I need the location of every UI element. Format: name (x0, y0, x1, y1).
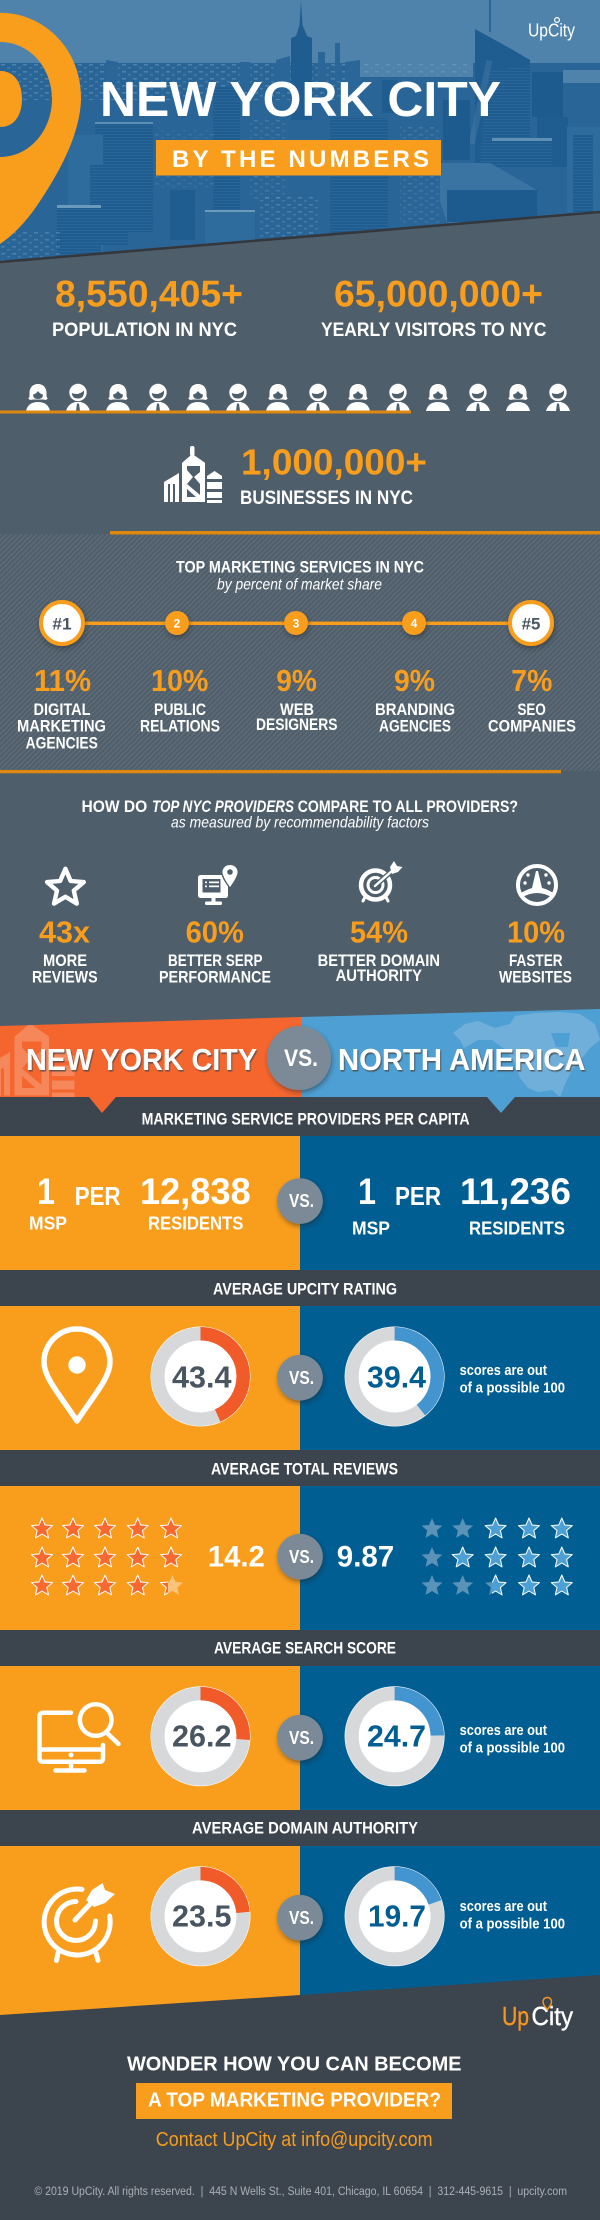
banner: New York City: NEW YORK CITY (26, 1042, 257, 1077)
panel: NYC per capita (0, 1136, 300, 1270)
vs badge: VS. (289, 1547, 314, 1567)
factor: better SERP performance (159, 864, 271, 987)
stat: businesses: 1,000,000+ (241, 442, 427, 482)
gray stats background (0, 200, 600, 1030)
stat: yearly visitors (321, 274, 547, 341)
note: scores out of 100: scores are out (460, 1722, 547, 1739)
vs badge: VS. (289, 1368, 314, 1388)
factor: faster websites: 10% (507, 914, 565, 949)
logo: UpCity footer: Up (502, 2001, 529, 2031)
panel: North America per capita: PER (395, 1181, 441, 1211)
stat: population: 8,550,405+ (55, 274, 243, 314)
service: SEO companies (488, 663, 576, 736)
panel: NYC per capita: PER (75, 1181, 121, 1211)
donut: North America 19.7: 19.7 (368, 1899, 426, 1934)
value: 9.87: 9.87 (337, 1541, 394, 1574)
section: average domain authority (0, 1818, 600, 2015)
service: SEO companies: COMPANIES (488, 717, 576, 736)
stat: yearly visitors: 65,000,000+ (334, 274, 543, 314)
donut: North America 39.4 (345, 1326, 445, 1426)
section: average total reviews (0, 1459, 600, 1630)
footer text: © 2019 UpCity. All rights reserved. | 445 N Wells St., Suite 401, Chicago, IL 60654 | 312-445-9615 | upcity.com (34, 2186, 567, 2198)
panel: top marketing services (0, 531, 600, 773)
stat: population (52, 274, 243, 341)
icon: large orange location pin (0, 13, 81, 244)
service: SEO companies: SEO (518, 700, 546, 719)
service: branding agencies: BRANDING (375, 700, 455, 719)
icon: monitor with pin (198, 864, 239, 905)
service: public relations: RELATIONS (140, 717, 220, 736)
factor: more reviews: MORE (43, 951, 87, 970)
stars: NYC (32, 1518, 183, 1595)
service: SEO companies: 7% (511, 663, 552, 698)
factor: better SERP performance: 60% (186, 914, 244, 949)
heading: how do top NYC providers compare (82, 797, 518, 832)
donut: NYC 23.5 (150, 1866, 250, 1966)
stars: North America (422, 1518, 572, 1595)
icon: target with arrow (361, 861, 402, 901)
stat: population: POPULATION IN NYC (52, 320, 237, 341)
donut: NYC 26.2 (150, 1686, 250, 1786)
service: branding agencies: 9% (394, 663, 435, 698)
factor: faster websites: FASTER (509, 951, 563, 970)
service: digital marketing agencies (17, 663, 106, 752)
note: scores out of 100 (460, 1898, 565, 1933)
donut: North America 39.4: 39.4 (367, 1359, 427, 1394)
icon: target with arrow (44, 1883, 115, 1960)
vs badge (277, 1534, 323, 1579)
factor: faster websites (499, 866, 572, 987)
vs badge (277, 1895, 323, 1940)
factor: more reviews (32, 869, 98, 987)
factor: faster websites: WEBSITES (499, 968, 572, 987)
panel: North America per capita: RESIDENTS (469, 1218, 565, 1238)
logo: UpCity footer (502, 1998, 573, 2031)
vs badge: VS. (289, 1191, 314, 1211)
service: web designers: 9% (276, 663, 317, 698)
factor: more reviews: REVIEWS (32, 968, 98, 987)
panel: NYC per capita: MSP (29, 1213, 67, 1233)
factor: better domain authority (318, 861, 440, 985)
banner: New York City (0, 1012, 301, 1113)
icon: speedometer (518, 866, 556, 904)
ranking timeline: 2 (174, 616, 181, 630)
icon: monitor with magnifier (40, 1704, 118, 1770)
ranking timeline: 4 (411, 616, 418, 630)
banner: North America: NORTH AMERICA (338, 1042, 586, 1077)
heading: AVERAGE DOMAIN AUTHORITY (192, 1818, 419, 1837)
factor: better SERP performance: BETTER SERP (168, 951, 262, 970)
note: scores out of 100 (460, 1362, 565, 1397)
section: average search score (0, 1638, 600, 1810)
stat: yearly visitors: YEARLY VISITORS TO NYC (321, 320, 547, 341)
panel: North America per capita (300, 1136, 600, 1270)
service: public relations: PUBLIC (154, 700, 206, 719)
heading: how do top NYC providers compare: COMPARE TO ALL PROVIDERS? (298, 797, 518, 816)
title: NEW YORK CITY (100, 73, 501, 127)
heading: how do top NYC providers compare: TOP NYC PROVIDERS (152, 797, 295, 816)
note: scores out of 100: of a possible 100 (460, 1916, 565, 1933)
heading: AVERAGE UPCITY RATING (213, 1280, 397, 1299)
note: scores out of 100 (460, 1722, 565, 1757)
call to action banner (136, 2083, 452, 2119)
contact line: Contact UpCity at info@upcity.com (156, 2129, 433, 2151)
vs badge (277, 1715, 323, 1760)
service: web designers: WEB (280, 700, 314, 719)
heading: AVERAGE SEARCH SCORE (214, 1638, 396, 1657)
section band: NYC vs North America (0, 1009, 600, 1113)
call to action banner: A TOP MARKETING PROVIDER? (148, 2090, 441, 2112)
subtitle banner: BY THE NUMBERS (172, 146, 429, 173)
service: public relations: 10% (151, 663, 208, 698)
panel: NYC per capita: 12,838 (140, 1171, 251, 1212)
service: digital marketing agencies: MARKETING (17, 717, 106, 736)
service: public relations (140, 663, 220, 736)
donut: NYC 23.5: 23.5 (172, 1899, 232, 1934)
donut: NYC 43.4 (150, 1326, 250, 1426)
factor: more reviews: 43x (39, 914, 91, 949)
service: web designers (256, 663, 338, 734)
donut: NYC 43.4: 43.4 (172, 1359, 232, 1394)
factor: better SERP performance: PERFORMANCE (159, 968, 271, 987)
note: scores out of 100: scores are out (460, 1898, 547, 1915)
service: web designers: DESIGNERS (256, 715, 338, 734)
vs badge: VS. (289, 1908, 314, 1928)
icon: star outline (47, 869, 84, 904)
note: scores out of 100: scores are out (460, 1362, 547, 1379)
service: digital marketing agencies: AGENCIES (26, 733, 98, 752)
icon: pin outline (44, 1329, 110, 1421)
factor: better domain authority: 54% (350, 914, 408, 949)
service: digital marketing agencies: DIGITAL (34, 700, 90, 719)
banner: North America (301, 1009, 600, 1113)
ranking timeline (41, 602, 552, 644)
ranking timeline: 3 (293, 616, 300, 630)
donut: North America 19.7 (345, 1866, 445, 1966)
heading: AVERAGE TOTAL REVIEWS (211, 1459, 398, 1478)
vs badge: VS. (289, 1728, 314, 1748)
heading: MARKETING SERVICE PROVIDERS PER CAPITA (142, 1109, 470, 1128)
donut: NYC 26.2: 26.2 (172, 1719, 232, 1754)
panel: NYC per capita: RESIDENTS (148, 1213, 243, 1233)
service: digital marketing agencies: 11% (34, 663, 91, 698)
panel: North America per capita: 1 (358, 1171, 376, 1212)
service: branding agencies: AGENCIES (379, 717, 451, 736)
stat: businesses (240, 442, 427, 509)
section: average UpCity rating (0, 1280, 600, 1450)
heading: TOP MARKETING SERVICES IN NYC (176, 558, 424, 577)
vs badge (277, 1355, 323, 1400)
call to action heading: WONDER HOW YOU CAN BECOME (127, 2054, 462, 2076)
people icon row (26, 384, 570, 411)
factor: better domain authority: BETTER DOMAIN (318, 951, 440, 970)
note: scores out of 100: of a possible 100 (460, 1380, 565, 1397)
icon: city buildings (164, 446, 222, 503)
service: branding agencies (375, 663, 455, 736)
panel: North America per capita: 11,236 (460, 1171, 571, 1212)
logo: UpCity: UpCity (528, 20, 576, 41)
donut: North America 24.7: 24.7 (367, 1719, 426, 1754)
ranking timeline: #1 (52, 614, 72, 633)
subheading: by percent of market share (217, 576, 382, 593)
vs badge: VS. (284, 1045, 318, 1072)
note: scores out of 100: of a possible 100 (460, 1740, 565, 1757)
section: marketing service providers per capita (0, 1109, 600, 1270)
ranking timeline: #5 (522, 614, 540, 633)
value: 14.2: 14.2 (208, 1541, 265, 1574)
panel: North America per capita: MSP (352, 1218, 390, 1238)
factor: better domain authority: AUTHORITY (336, 966, 423, 985)
stat: businesses: BUSINESSES IN NYC (240, 488, 413, 509)
header: skyline photo panel (0, 0, 600, 268)
logo: UpCity footer: City (532, 2001, 573, 2031)
donut: North America 24.7 (345, 1686, 445, 1786)
panel: NYC per capita: 1 (37, 1171, 55, 1212)
vs badge (267, 1026, 331, 1090)
heading: how do top NYC providers compare: as measured by recommendability factors (171, 815, 429, 832)
vs badge (277, 1178, 323, 1224)
header bottom edge (0, 212, 600, 262)
heading: how do top NYC providers compare: HOW DO (82, 797, 147, 816)
subtitle banner (156, 140, 441, 176)
